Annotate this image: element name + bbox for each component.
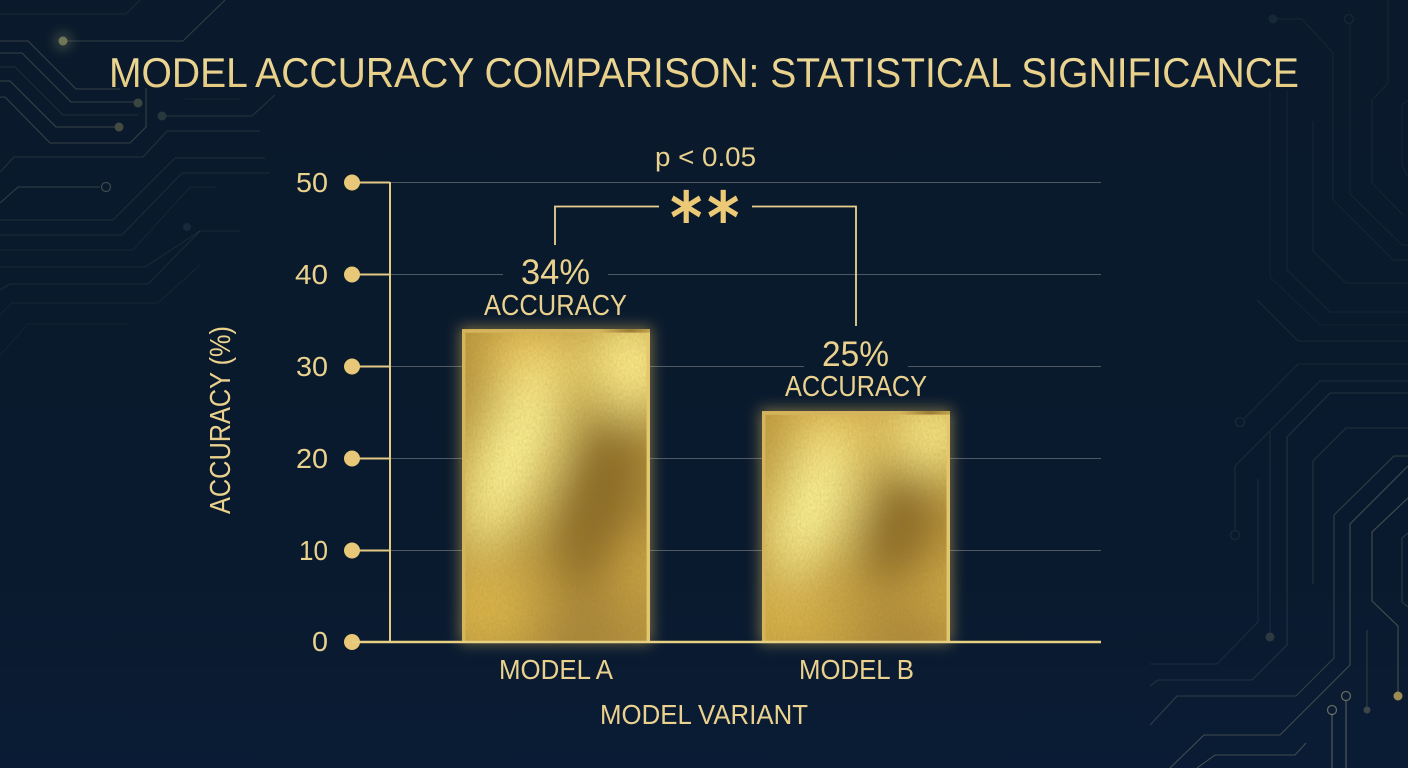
bar: Model B <box>750 400 962 652</box>
significance bracket <box>555 206 856 326</box>
x axis line <box>352 641 1101 643</box>
value label: Model B: 25% <box>822 335 889 374</box>
significance stars: ** <box>670 177 739 260</box>
bar: Model A <box>450 318 662 652</box>
p value: p < 0.05 <box>655 142 756 172</box>
value label: Model A <box>484 253 627 322</box>
y axis title: ACCURACY (%) <box>205 326 237 514</box>
title: MODEL ACCURACY COMPARISON: STATISTICAL SIGNIFICANCE <box>109 49 1299 96</box>
circuit pattern: right side <box>1150 0 1408 768</box>
value label: Model A: 34% <box>521 253 590 292</box>
x axis title: MODEL VARIANT <box>600 699 808 730</box>
bar chart <box>205 142 1101 730</box>
y tick labels: 30 <box>296 351 328 382</box>
horizontal grid lines <box>390 182 1101 550</box>
label: Model A: MODEL A <box>499 654 613 685</box>
value label: Model B <box>785 335 927 403</box>
y tick labels: 40 <box>295 259 328 290</box>
y tick labels: 0 <box>312 626 328 657</box>
label: Model B: MODEL B <box>799 654 914 685</box>
y tick labels <box>295 167 328 657</box>
y tick labels: 10 <box>299 535 328 566</box>
value label: Model B: ACCURACY <box>785 371 927 403</box>
y tick labels: 20 <box>296 443 328 474</box>
y axis <box>295 167 390 657</box>
y tick labels: 50 <box>296 167 328 198</box>
circuit pattern: top left <box>0 0 275 355</box>
value label: Model A: ACCURACY <box>484 290 627 322</box>
